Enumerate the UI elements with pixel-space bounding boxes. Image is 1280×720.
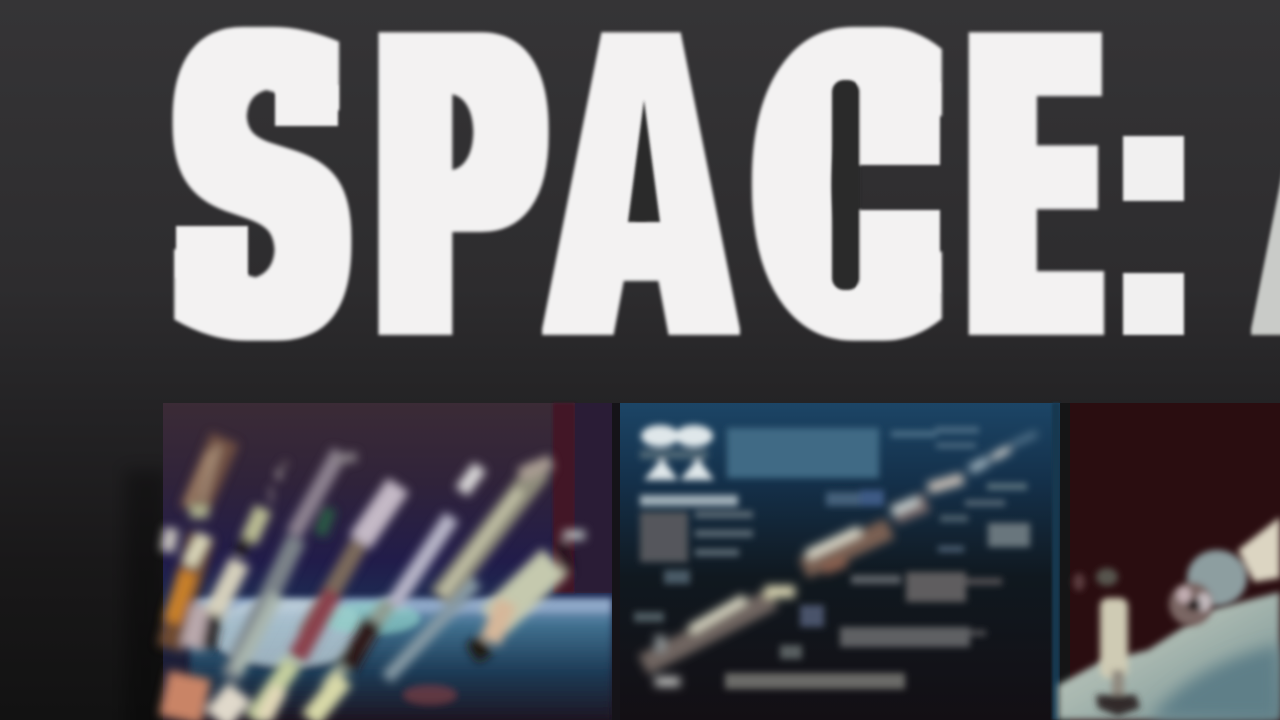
panel: launch vehicle diagram (612, 403, 1060, 720)
rockets (167, 438, 585, 720)
rocket: diagonal stack (643, 433, 1037, 682)
earth limb (1058, 592, 1280, 720)
spacecraft: station module (1169, 517, 1280, 626)
icon: four capsule thumbnails (640, 425, 714, 480)
title colon (1123, 136, 1184, 335)
earth horizon (190, 598, 612, 720)
title: SPACE: A (169, 0, 1280, 429)
panel: rocket line-up (163, 403, 612, 720)
title letter weight adjustments (176, 80, 940, 293)
left shadow beside panels (125, 470, 167, 720)
text blocks: illegible caption blocks (634, 427, 1030, 689)
panel: orbital scene (1052, 403, 1280, 720)
spacecraft: standing shuttle (1073, 568, 1140, 716)
